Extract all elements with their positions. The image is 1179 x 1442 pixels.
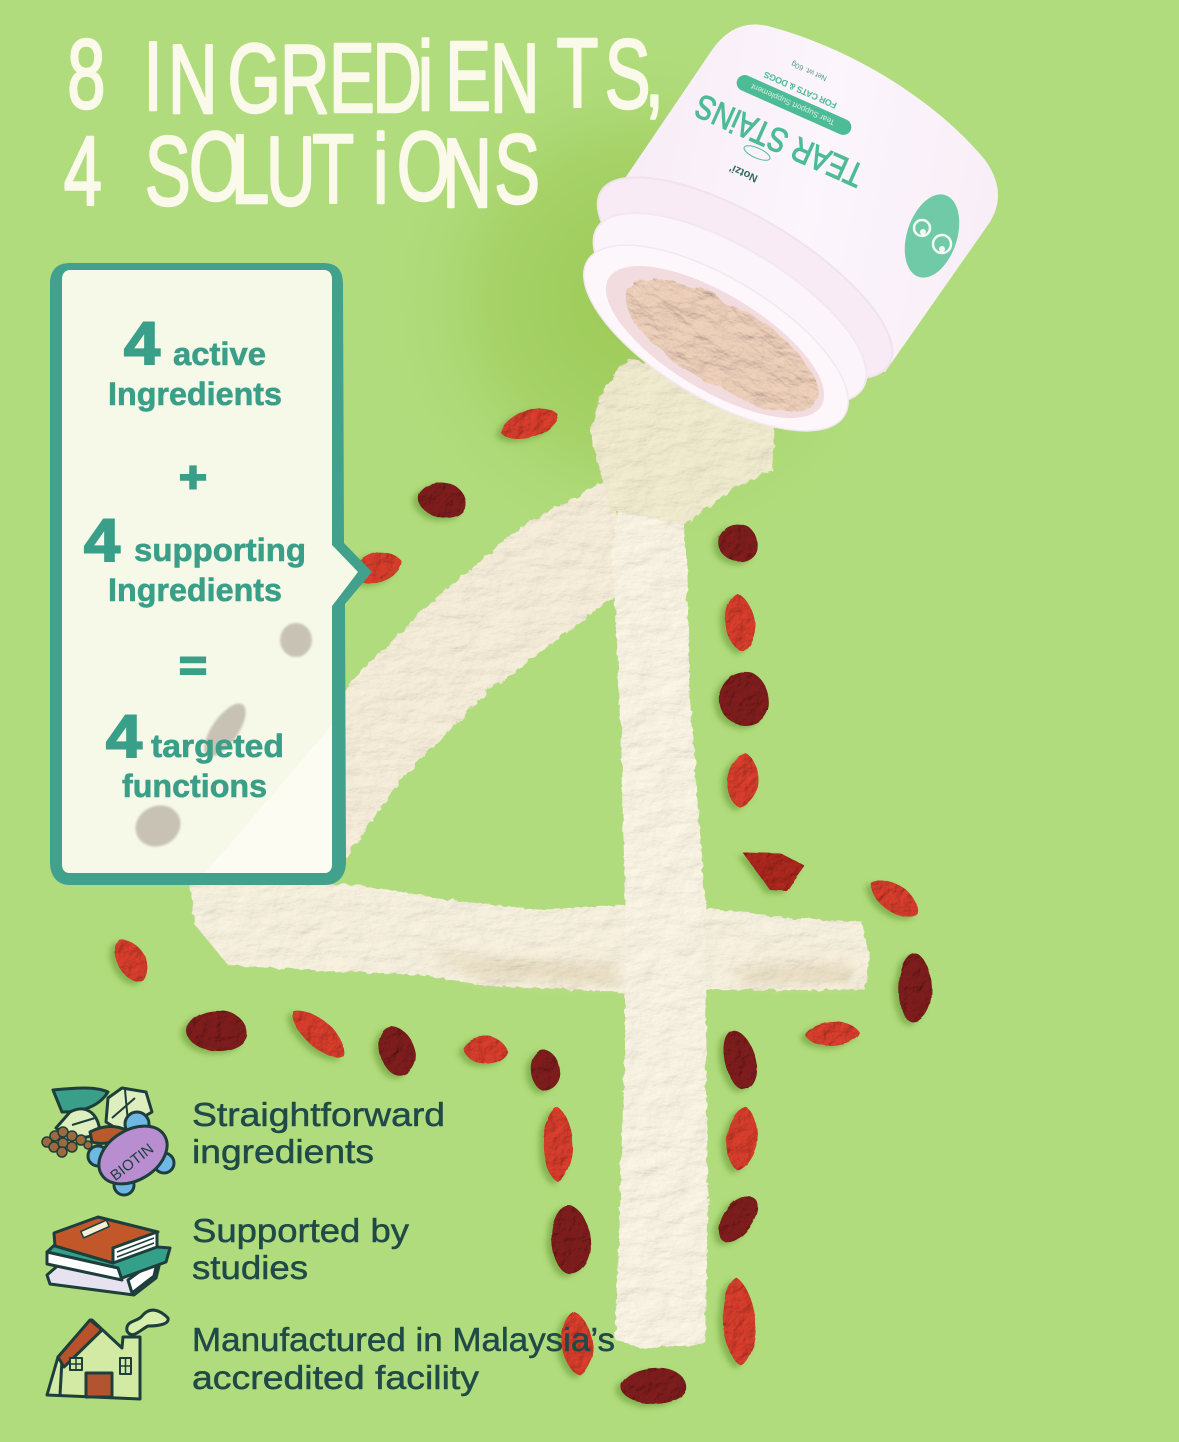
- panel: ingredient equation callout: [50, 263, 372, 885]
- equation text: +: [179, 453, 207, 502]
- label: supported by studies: Supported by: [192, 1212, 410, 1249]
- equation text: =: [179, 641, 207, 690]
- jar body: [617, 24, 998, 372]
- jar label: FOR CATS & DOGS: [761, 69, 838, 111]
- label: manufactured in malaysia: accredited facility: [192, 1359, 480, 1396]
- equation text: Ingredients: [108, 376, 282, 412]
- equation text: 4: [124, 310, 161, 377]
- jar rim and powder inside: [557, 209, 875, 467]
- title: 8 INGREDiENTS,: [67, 17, 664, 134]
- jar label: Notzi': [728, 161, 760, 184]
- equation text: active: [173, 336, 266, 372]
- label: manufactured in malaysia: [192, 1321, 615, 1396]
- equation text: 4: [84, 507, 121, 574]
- equation text: Ingredients: [108, 572, 282, 608]
- powder numeral four: [190, 358, 870, 1348]
- label: supported by studies: studies: [192, 1249, 308, 1286]
- equation text: [84, 310, 306, 804]
- label: straightforward ingredients: ingredients: [192, 1133, 374, 1170]
- label: manufactured in malaysia: Manufactured in Malaysia’s: [192, 1321, 615, 1358]
- title: [64, 17, 664, 228]
- equation text: functions: [122, 768, 267, 804]
- callout frame: [50, 263, 372, 885]
- icon: biotin and plant ingredients: BIOTIN: [107, 1140, 157, 1185]
- icon: house with chimney: [47, 1310, 168, 1399]
- label: straightforward ingredients: Straightforward: [192, 1096, 445, 1133]
- label: supported by studies: [192, 1212, 410, 1286]
- jar label: TEAR STAiNS: [690, 86, 869, 194]
- jar label: Net wt. 60g: [790, 59, 828, 83]
- label: straightforward ingredients: [192, 1096, 445, 1170]
- equation text: targeted: [151, 728, 284, 764]
- scattered goji berries: [107, 401, 931, 1405]
- equation text: supporting: [134, 532, 306, 568]
- ghost berries behind panel: [129, 623, 312, 854]
- jar of tear stains supplement: [557, 24, 998, 467]
- jar label: Tear Support Supplement: [749, 81, 836, 127]
- jar logo: [895, 187, 969, 285]
- icon: stack of books: [47, 1217, 170, 1295]
- icon: biotin and plant ingredients: [42, 1088, 178, 1196]
- equation text: 4: [106, 703, 143, 770]
- title: 4 SOLUTiONS: [64, 111, 540, 228]
